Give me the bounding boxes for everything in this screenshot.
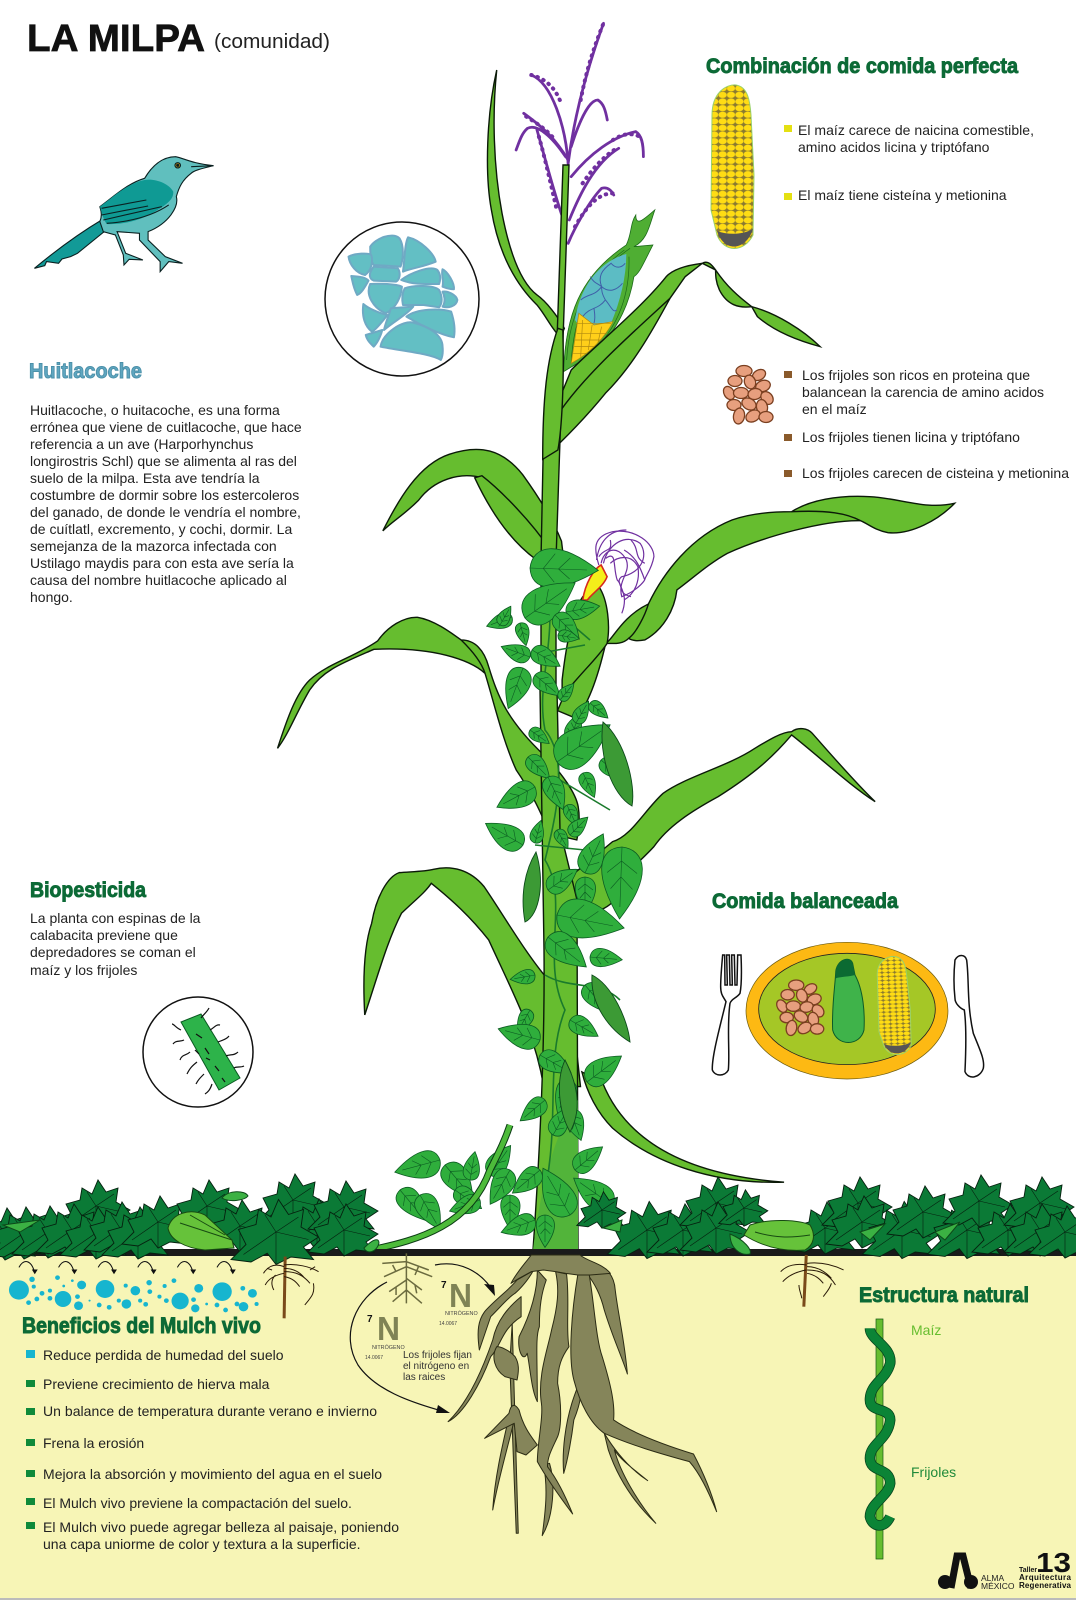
- list: mulch benefits: Previene crecimiento de hierva mala: [43, 1376, 270, 1392]
- title: LA MILPA: [27, 18, 205, 60]
- text: biopesticide: [30, 910, 201, 978]
- text: huitlacoche description: suelo de la milpa. Esta ave tendría la: [30, 470, 260, 486]
- maize big roots: [448, 1255, 717, 1536]
- young bean plant stem: [370, 1125, 510, 1250]
- text: huitlacoche description: longirostris Schl) que se alimenta al ras del: [30, 453, 297, 469]
- list: mulch benefits: El Mulch vivo previene la compactación del suelo.: [43, 1495, 352, 1511]
- bean vine stems: [530, 570, 620, 1190]
- heading: Comida balanceada: Comida balanceada: [712, 890, 898, 913]
- moisture bubbles: [9, 1275, 259, 1312]
- maize ear: upper with huitlacoche: [564, 210, 655, 372]
- text: huitlacoche description: semejanza de la mazorca infectada con: [30, 538, 277, 554]
- text: biopesticide: La planta con espinas de la: [30, 910, 201, 926]
- nitrogen symbol lower: N: [377, 1310, 400, 1347]
- text: huitlacoche description: [30, 402, 302, 605]
- heading: Estructura natural: Estructura natural: [859, 1284, 1029, 1307]
- maize tassel spikelets: [524, 23, 640, 227]
- icon: zucchini: [832, 959, 864, 1042]
- list: bean facts: Los frijoles tienen licina y triptófano: [802, 429, 1020, 445]
- nitrogen text: el nitrógeno en: [403, 1361, 469, 1372]
- list: corn facts: amino acidos licina y triptófano: [798, 139, 990, 155]
- icon: knife: [954, 955, 984, 1077]
- plant: maize leaves behind stalk: [278, 70, 955, 1182]
- nitrogen symbol lower: NITRÓGENO: [372, 1344, 405, 1351]
- logo: Taller 13: 13: [1036, 1547, 1071, 1578]
- list: mulch benefits: El Mulch vivo puede agregar belleza al paisaje, poniendo: [43, 1519, 399, 1535]
- bean root arrow 2: [435, 1264, 495, 1296]
- logo: Taller 13: [1019, 1547, 1072, 1590]
- nitrogen symbol upper: 7: [441, 1280, 447, 1291]
- nitrogen text: las raices: [403, 1372, 445, 1383]
- title: (comunidad): [214, 31, 330, 53]
- list: mulch benefits: Un balance de temperatura durante verano e invierno: [43, 1403, 377, 1419]
- bean vine spiral: [870, 1328, 890, 1525]
- heading: Huitlacoche: Huitlacoche: [29, 360, 142, 383]
- icon: fork: [712, 955, 742, 1075]
- nitrogen text: [403, 1350, 472, 1383]
- logo: Alma Mexico: [938, 1556, 1015, 1591]
- list: bean facts: en el maíz: [802, 401, 867, 417]
- squash roots right: [781, 1255, 844, 1307]
- maize tassel: [516, 23, 643, 243]
- nitrogen symbol lower: [365, 1310, 405, 1361]
- list: bean facts: Los frijoles son ricos en proteina que: [802, 367, 1030, 383]
- icon: corn cob: [711, 85, 754, 248]
- nitrogen symbol upper: N: [449, 1277, 472, 1314]
- bean plant roots: [382, 1253, 432, 1303]
- logo: Alma Mexico: ALMA: [981, 1573, 1004, 1583]
- leaf: left middle lower: [278, 617, 579, 840]
- icon: plate corn: [876, 956, 912, 1055]
- maize stalk: [533, 165, 608, 1250]
- maize stick: [876, 1319, 883, 1559]
- leaf: bottom right drooping: [582, 1072, 784, 1182]
- text: biopesticide: calabacita previene que: [30, 927, 178, 943]
- logo: Alma Mexico: MÉXICO: [981, 1581, 1015, 1591]
- text: huitlacoche description: errónea que viene de cuitlacoche, que hace: [30, 419, 302, 435]
- title: [27, 18, 330, 60]
- icon: water arrows: [19, 1262, 235, 1273]
- logo: Taller 13: Regenerativa: [1019, 1581, 1072, 1590]
- text: biopesticide: maíz y los frijoles: [30, 962, 137, 978]
- list: mulch benefits: Frena la erosión: [43, 1435, 144, 1451]
- diagram: natural structure: [870, 1319, 956, 1559]
- text: huitlacoche description: causa del nombre huitlacoche aplicado al: [30, 572, 287, 588]
- bean root arrow 1: [350, 1282, 450, 1413]
- text: huitlacoche description: costumbre de dormir sobre los estercoleros: [30, 487, 299, 503]
- living mulch: left squash leaves: [0, 1174, 379, 1264]
- icon: plate: [746, 942, 948, 1079]
- leaf: right lower: [546, 729, 875, 917]
- leaf: left lower: [364, 868, 580, 1087]
- leaf: middle left upper: [383, 449, 565, 574]
- text: huitlacoche description: Ustilago maydis para con esta ave sería la: [30, 555, 294, 571]
- heading: Beneficios del Mulch vivo: Beneficios del Mulch vivo: [22, 1313, 261, 1338]
- bean vine leaves: [392, 548, 643, 1247]
- icon: huitlacoche cells circle: [325, 222, 479, 376]
- list: bean facts: Los frijoles carecen de cisteina y metionina: [802, 465, 1069, 481]
- ground line: [0, 1249, 1076, 1256]
- heading: Biopesticida: Biopesticida: [30, 879, 146, 902]
- nitrogen symbol upper: 14.0067: [439, 1321, 457, 1327]
- text: huitlacoche description: hongo.: [30, 589, 73, 605]
- bullet: moisture: [26, 1350, 35, 1358]
- text: huitlacoche description: Huitlacoche, o huitacoche, es una forma: [30, 402, 280, 418]
- list: mulch benefits: [26, 1347, 399, 1552]
- maize ear: lower husk: [562, 587, 608, 697]
- plate illustration: [712, 942, 984, 1079]
- maize ear tip with silk: [583, 530, 654, 613]
- list: corn facts: El maíz carece de naicina comestible,: [798, 122, 1034, 138]
- soil panel: [0, 1254, 1076, 1599]
- list: bean facts: balancean la carencia de amino acidos: [802, 384, 1044, 400]
- nitrogen text: Los frijoles fijan: [403, 1350, 472, 1361]
- bean pods on vine: [523, 722, 633, 1132]
- label: frijoles: Frijoles: [911, 1464, 956, 1480]
- list: mulch benefits: Mejora la absorción y movimiento del agua en el suelo: [43, 1466, 382, 1482]
- leaf: right upper: [543, 262, 820, 459]
- nitrogen symbol lower: 14.0067: [365, 1355, 383, 1361]
- list: corn facts: El maíz tiene cisteína y metionina: [798, 187, 1007, 203]
- logo: Taller 13: Taller: [1019, 1567, 1037, 1574]
- bottom border: [0, 1598, 1076, 1600]
- icon: bird: [34, 157, 214, 272]
- icon: beans: [721, 366, 776, 425]
- leaf: top left: [487, 70, 564, 337]
- list: mulch benefits: Reduce perdida de humedad del suelo: [43, 1347, 284, 1363]
- list: corn facts: [784, 122, 1034, 203]
- text: huitlacoche description: del ganado, de donde le vendría el nombre,: [30, 504, 301, 520]
- label: maiz: Maíz: [911, 1322, 941, 1338]
- living mulch: right squash leaves: [577, 1175, 1076, 1259]
- list: bean facts: [784, 367, 1069, 481]
- icon: spiny squash circle: [143, 997, 253, 1107]
- list: mulch benefits: una capa uniorme de color y textura a la superficie.: [43, 1536, 361, 1552]
- text: huitlacoche description: de cuítlatl, excremento, y cochi, dormir. La: [30, 521, 292, 537]
- text: huitlacoche description: referencia a un ave (Harporhynchus: [30, 436, 253, 452]
- heading: Combinación: Combinación de comida perfecta: [706, 55, 1018, 78]
- text: biopesticide: depredadores se coman el: [30, 944, 196, 960]
- nitrogen symbol upper: [439, 1277, 478, 1327]
- leaf: right middle: [558, 496, 955, 718]
- nitrogen symbol lower: 7: [367, 1314, 373, 1325]
- icon: plate beans: [775, 980, 826, 1036]
- nitrogen symbol upper: NITRÓGENO: [445, 1310, 478, 1317]
- squash roots left: [263, 1257, 319, 1318]
- logo: Taller 13: Arquitectura: [1019, 1573, 1072, 1582]
